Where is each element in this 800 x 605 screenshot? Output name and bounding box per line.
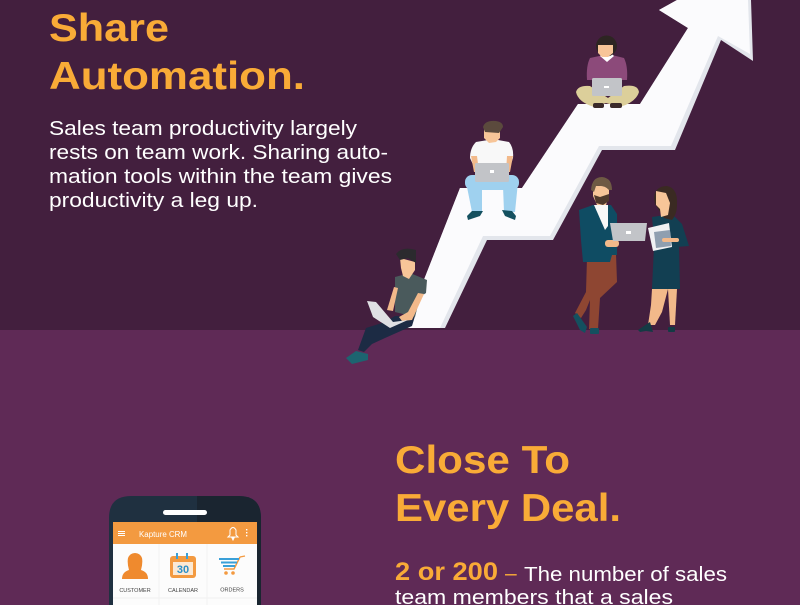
jacket	[652, 214, 689, 250]
speaker	[163, 510, 207, 515]
torso	[395, 273, 427, 317]
hair	[654, 186, 677, 220]
laptop	[475, 163, 509, 182]
beard	[594, 194, 609, 205]
heading: Share Automation	[49, 7, 305, 98]
shins	[466, 182, 482, 212]
tablet	[654, 230, 671, 248]
hair	[483, 121, 503, 133]
jacket	[579, 205, 617, 262]
icon labels	[119, 588, 244, 594]
sweater	[587, 55, 627, 80]
arms	[471, 156, 479, 172]
figure: man sitting at arrow base with laptop	[346, 249, 427, 364]
screen	[113, 522, 257, 605]
panel: top dark background	[0, 0, 800, 330]
heading: Share Automation: Automation.	[49, 55, 305, 98]
grid lines	[113, 544, 257, 605]
menu icon	[118, 531, 125, 536]
icon: calendar	[170, 553, 196, 578]
phone body	[109, 496, 261, 605]
figure: person cross-legged with laptop	[576, 36, 639, 108]
hand	[605, 240, 619, 247]
white shirt	[594, 205, 608, 230]
thighs	[465, 175, 519, 190]
trousers	[575, 254, 617, 329]
dress	[652, 246, 680, 289]
legs	[358, 316, 415, 352]
figure: businesswoman with documents	[638, 186, 689, 332]
laptop	[367, 301, 408, 328]
hair	[596, 36, 617, 56]
text block: share automation description	[49, 117, 392, 212]
face	[656, 191, 670, 217]
text block: 2 or 200 description	[395, 558, 727, 605]
hair	[396, 249, 416, 263]
heading: Close To Every Deal: Every Deal.	[395, 487, 621, 530]
heading: Close To Every Deal: Close To	[395, 439, 570, 482]
arm	[399, 293, 424, 321]
figure: bearded man in blue jacket holding laptop	[573, 177, 647, 334]
icon labels: CUSTOMER	[119, 588, 151, 594]
laptop	[610, 223, 647, 241]
app header	[113, 522, 257, 544]
shoes	[573, 313, 587, 333]
text block: share automation description: rests on team work. Sharing auto-	[49, 141, 388, 164]
collar	[600, 54, 614, 62]
face and neck	[400, 258, 415, 279]
text block: share automation description: Sales team productivity largely	[49, 117, 358, 140]
icon: cart	[219, 556, 245, 575]
heels	[638, 322, 653, 332]
bell icon	[228, 528, 238, 540]
text block: 2 or 200 description: 2 or 200	[395, 558, 498, 586]
papers	[648, 223, 672, 251]
text block: 2 or 200 description: –	[505, 562, 517, 585]
phone: Kapture CRM mobile app	[109, 496, 261, 605]
shoes	[467, 211, 483, 220]
face	[484, 128, 500, 143]
icon labels: ORDERS	[220, 588, 244, 594]
heading: Close To Every Deal	[395, 439, 621, 530]
hair	[591, 177, 612, 192]
face	[593, 186, 609, 205]
text block: share automation description: productivity a leg up.	[49, 189, 258, 212]
hand	[662, 238, 679, 242]
figure: man in white t-shirt with laptop	[465, 121, 519, 220]
laptop	[592, 78, 622, 96]
shoes	[593, 103, 604, 108]
crossed legs	[576, 86, 639, 107]
text block: share automation description: mation tools within the team gives	[49, 165, 392, 188]
icon: customer	[122, 553, 148, 579]
heading: Share Automation: Share	[49, 7, 169, 50]
overflow menu	[246, 529, 247, 536]
legs	[648, 289, 668, 325]
panel: bottom purple background	[0, 330, 800, 605]
icon: calendar: 30	[177, 564, 189, 576]
t-shirt	[470, 140, 513, 176]
arrow: rising white growth arrow	[405, 0, 753, 328]
face	[598, 45, 613, 57]
text block: 2 or 200 description: The number of sales	[524, 563, 727, 586]
shoes	[346, 351, 368, 364]
app title: Kapture CRM	[139, 530, 187, 539]
icon labels: CALENDAR	[168, 588, 198, 594]
